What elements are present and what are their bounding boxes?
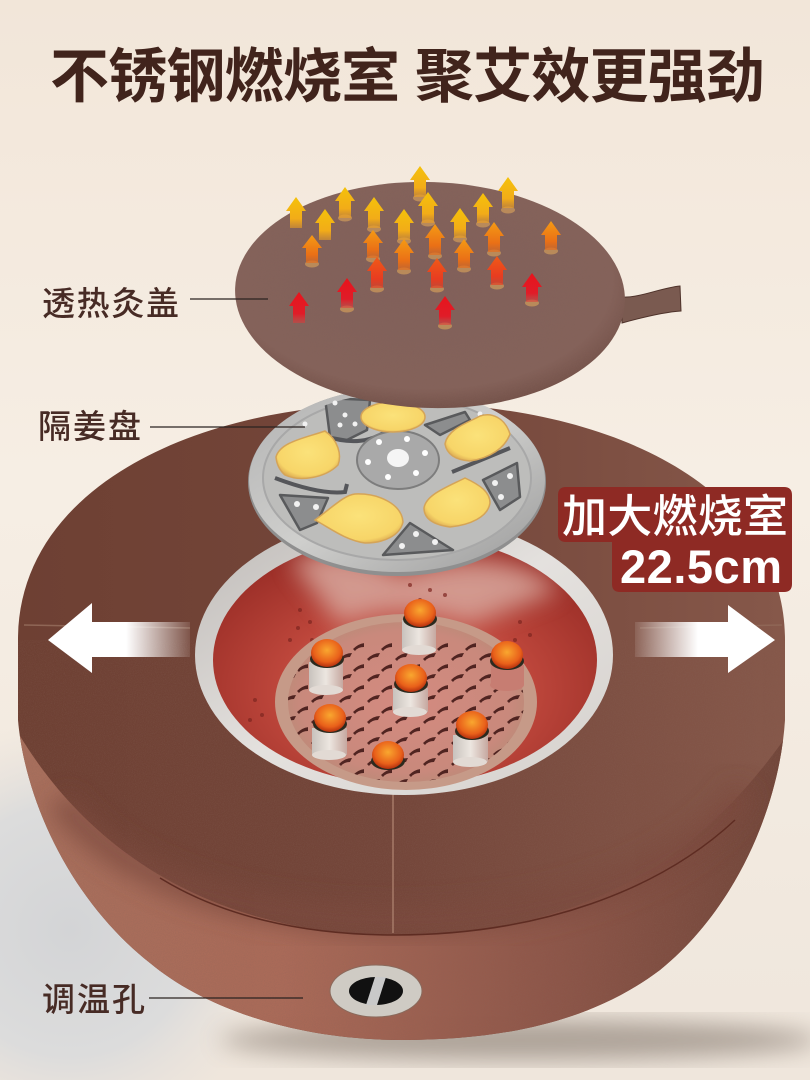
moxa stick 4 bbox=[393, 664, 428, 717]
red-orange arrows bbox=[367, 256, 507, 288]
moxibustion cushion body bbox=[18, 408, 785, 1040]
lid handle bbox=[622, 286, 681, 323]
lid vent holes bbox=[305, 194, 558, 330]
callout: enlarged chamber: 22.5cm bbox=[620, 540, 782, 593]
plate recesses bbox=[280, 398, 520, 555]
air vent bbox=[330, 965, 422, 1017]
heat-permeable lid bbox=[231, 175, 681, 415]
moxa stick 3 bbox=[490, 641, 524, 691]
moxa stick 1 bbox=[402, 599, 437, 655]
title: 不锈钢燃烧室 聚艾效更强劲 bbox=[50, 44, 765, 110]
arrow: expand left bbox=[48, 603, 190, 673]
stainless steel combustion chamber bbox=[195, 515, 613, 795]
ginger plate bbox=[248, 388, 546, 576]
ginger slices bbox=[276, 402, 510, 543]
plate hub bbox=[357, 431, 439, 489]
heat arrows bbox=[286, 166, 561, 325]
lower band of cushion bbox=[18, 642, 783, 1040]
callout: enlarged chamber bbox=[558, 487, 792, 593]
yellow arrows bbox=[286, 166, 518, 240]
moxa stick 6 bbox=[453, 711, 489, 767]
orange arrows bbox=[302, 221, 561, 270]
label: air vent: 调温孔 bbox=[42, 981, 145, 1018]
plate holes bbox=[294, 400, 513, 549]
moxa stick 2 bbox=[309, 639, 344, 695]
callout: enlarged chamber: 加大燃烧室 bbox=[562, 491, 788, 542]
red arrows bbox=[289, 273, 542, 325]
moxa burners bbox=[309, 599, 524, 770]
moxa stick 5 bbox=[312, 704, 347, 760]
arrow: expand right bbox=[635, 605, 775, 673]
label: lid: 透热灸盖 bbox=[42, 285, 179, 322]
chamber floor bbox=[275, 614, 537, 790]
moxa stick 7 bbox=[371, 741, 405, 770]
label: ginger plate: 隔姜盘 bbox=[38, 408, 141, 445]
